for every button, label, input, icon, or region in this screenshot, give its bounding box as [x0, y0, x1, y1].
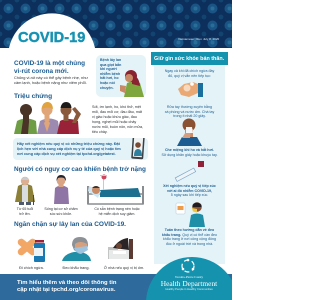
intro text: Chủng vi-rút này có thể gây bệnh nhẹ, như	[14, 75, 88, 80]
text: handwashing: xà phòng và nước ấm. Chà tay	[165, 110, 214, 114]
symptoms list: vị giác hoặc khứu giác, đau	[92, 115, 137, 119]
icon: washing hands	[178, 82, 203, 97]
label: over 65	[16, 207, 33, 216]
intro heading: COVID-19 là một chủng	[14, 60, 85, 67]
(older man)	[15, 184, 35, 202]
text: get tested	[163, 184, 216, 197]
label: stay home if sick: Ở nhà nếu quý vị bị ốm.	[104, 266, 144, 270]
heading text: Giữ gìn sức khỏe bản thân.	[154, 56, 224, 62]
text: get tested: 5 ngày sau khi tiếp xúc.	[171, 193, 208, 197]
(person with mask)	[62, 252, 91, 261]
callout: spread person	[96, 55, 146, 97]
text: get tested: với ai đó nhiễm COVID-19,	[167, 189, 212, 193]
heading: high risk people: Người có nguy cơ cao khiến bệnh trở nặng	[14, 166, 146, 173]
symptoms list: họng, nghẹt mũi hoặc chảy	[92, 120, 136, 124]
label: over 65: trở lên.	[19, 212, 31, 216]
callout text: chuyện.	[100, 86, 114, 90]
callout text: hắt hơi, ho	[100, 76, 119, 80]
callout text: Bệnh lây lan	[100, 58, 121, 62]
callout text: Hãy xét nghiệm nếu quý vị có những triệu chứng này. Đặt	[17, 142, 120, 146]
label: care facility	[44, 207, 78, 216]
illustration: risk groups	[15, 174, 144, 205]
language and date note: Vietnamese | Rev. July 8, 2020	[178, 37, 219, 41]
text: handwashing: trong ít nhất 20 giây.	[173, 114, 206, 118]
callout text: qua giọt bắn	[100, 63, 121, 67]
text: vaccine: đủ, quý vị vẫn nên tiếp tục:	[168, 74, 211, 78]
symptoms list: tiêu chảy.	[92, 130, 108, 134]
callout text: lịch hẹn với nhà cung cấp dịch vụ y tế của quý vị hoặc tìm	[17, 146, 121, 150]
panel: keep healthy	[154, 64, 225, 264]
(woman care home)	[54, 186, 69, 204]
header banner with pattern	[0, 0, 232, 48]
text: masks: khẩu trang. Quý vị có thể cần đeo	[162, 233, 217, 237]
footer text: cập nhật tại tpchd.org/coronavirus.	[17, 286, 116, 292]
text: handwashing	[164, 104, 214, 118]
callout text: nhiễm bệnh	[100, 72, 120, 76]
symptoms list: mỏi, đau mỏi cơ, đau đầu, mất	[92, 110, 142, 114]
(patient in bed)	[88, 194, 143, 204]
symptoms list: Sốt, ớn lạnh, ho, khó thở, mệt	[92, 105, 141, 109]
symptoms list: nước mũi, buồn nôn, nôn mửa,	[92, 125, 143, 129]
icon: person sneezing	[177, 118, 202, 146]
footer band	[0, 274, 232, 300]
text: masks	[162, 228, 217, 246]
label: serious conditions	[94, 206, 140, 216]
callout text: hoặc nói	[100, 81, 115, 85]
department name: Tacoma–Pierce County	[175, 275, 203, 279]
callout text	[100, 58, 122, 90]
health department: Health Department	[161, 279, 217, 288]
icon: coughing woman	[120, 70, 144, 97]
callout text: nơi cung cấp dịch vụ xét nghiệm tại tpchd.org/getatest.	[17, 152, 116, 156]
footer text: Tìm hiểu thêm và theo dõi thông tin	[17, 280, 116, 286]
footer text	[17, 280, 116, 292]
label: serious conditions: hệ miễn dịch suy giảm.	[99, 212, 135, 216]
intro heading: vi-rút corona mới.	[14, 68, 69, 75]
title circle	[9, 13, 95, 48]
text: masks: đúc ở ngoài trời và trong nhà.	[166, 242, 213, 246]
title: COVID-19	[18, 30, 85, 46]
panel heading: keep healthy	[151, 52, 228, 65]
text: cover coughs: Sử dụng khăn giấy hoặc khuỷu tay.	[161, 153, 218, 157]
label: serious conditions: Có sẵn bệnh trạng nền hoặc	[94, 207, 140, 211]
label: care facility: Sống tại cơ sở chăm	[44, 207, 78, 211]
text: get tested: Xét nghiệm nếu quý vị tiếp xúc	[163, 184, 216, 188]
icon: person with mask and card	[176, 202, 205, 227]
heading: symptoms: Triệu chứng	[14, 93, 52, 100]
text: vaccine	[165, 69, 214, 78]
label: vaccinated: Đi chích ngừa.	[19, 266, 44, 270]
callout text: khi người	[100, 67, 117, 71]
symptoms list	[92, 105, 143, 134]
logo mark	[181, 258, 195, 273]
icon: phone with doctor	[131, 138, 145, 160]
text: cover coughs: Che miệng khi ho và hắt hơi.	[165, 148, 214, 152]
logo circle	[146, 257, 232, 300]
text: handwashing: Rửa tay thường xuyên bằng	[167, 105, 212, 109]
callout text	[17, 142, 121, 156]
text: vaccine: Ngay cả khi đã chích ngừa đầy	[165, 69, 214, 73]
label: care facility: sóc sức khỏe.	[50, 212, 72, 216]
intro heading	[14, 60, 85, 75]
label: wear mask: Đeo khẩu trang.	[62, 266, 90, 270]
text: masks: khẩu trang ở nơi công cộng đông	[163, 237, 216, 241]
heading: prevent spread: Ngăn chặn sự lây lan của COVID-19.	[14, 221, 126, 228]
intro text	[14, 75, 88, 85]
illustration: three people with symptoms	[14, 102, 81, 134]
callout: get tested	[13, 138, 148, 160]
(sick in bed)	[108, 247, 118, 259]
tagline: Healthy People in Healthy Communities	[165, 288, 213, 291]
icon: test swab	[174, 161, 204, 182]
label: over 65: Từ 65 tuổi	[17, 207, 33, 211]
text: masks: Tuân theo hướng dẫn về đeo	[165, 228, 214, 232]
illustration: prevention	[18, 237, 133, 262]
text: cover coughs	[161, 148, 218, 157]
intro text: cảm lạnh, hoặc bệnh nặng như viêm phổi.	[14, 80, 87, 85]
(bandage and vaccine)	[16, 237, 38, 257]
